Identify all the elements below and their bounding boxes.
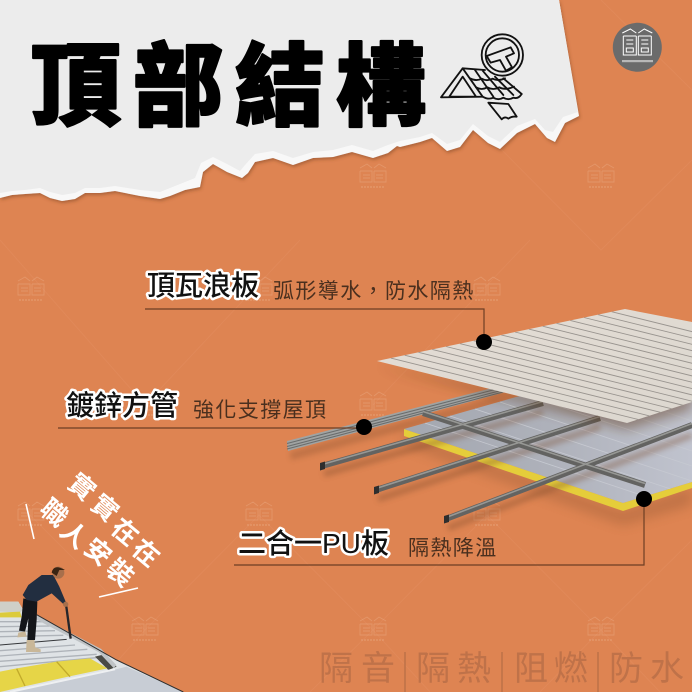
slogan: 裝 [100, 553, 140, 593]
label: roof sheet: 頂瓦浪板 [147, 270, 259, 301]
title: 頂部結構 [31, 38, 426, 138]
slogan: 人 [54, 515, 94, 555]
leader line: galvanized tube [58, 427, 364, 429]
description: galvanized tube: 強化支撐屋頂 [193, 399, 327, 422]
photo: worker on roof [0, 567, 183, 692]
icon: roof and hammer [441, 34, 523, 119]
slogan: 實 [85, 488, 125, 528]
torn paper header [0, 0, 579, 201]
logo badge [613, 23, 662, 72]
description: roof sheet: 弧形導水，防水隔熱 [273, 280, 475, 303]
slogan: 安 [78, 532, 118, 572]
leader line: roof sheet [145, 309, 484, 342]
bottom feature strip: 隔音隔熱阻燃防水 [319, 650, 684, 688]
slogan: 實 [62, 467, 102, 507]
label: PU panel: 二合一PU板 [238, 528, 389, 559]
label: galvanized tube: 鍍鋅方管 [66, 390, 178, 421]
slogan: 在 [105, 512, 145, 552]
diagram: roof sheet [377, 309, 692, 432]
slogan: 在 [126, 533, 166, 573]
slogan: 職 [34, 493, 74, 533]
description: PU panel: 隔熱降溫 [408, 537, 498, 560]
diagram: square tubes [320, 402, 692, 528]
marker dot: roof sheet [476, 334, 492, 350]
diagram: PU panel [404, 393, 692, 525]
leader line: PU panel [234, 499, 644, 565]
diagram: galvanized rail [287, 388, 513, 460]
slogan [26, 467, 166, 597]
marker dot: galvanized tube [356, 419, 372, 435]
marker dot: PU panel [636, 491, 652, 507]
